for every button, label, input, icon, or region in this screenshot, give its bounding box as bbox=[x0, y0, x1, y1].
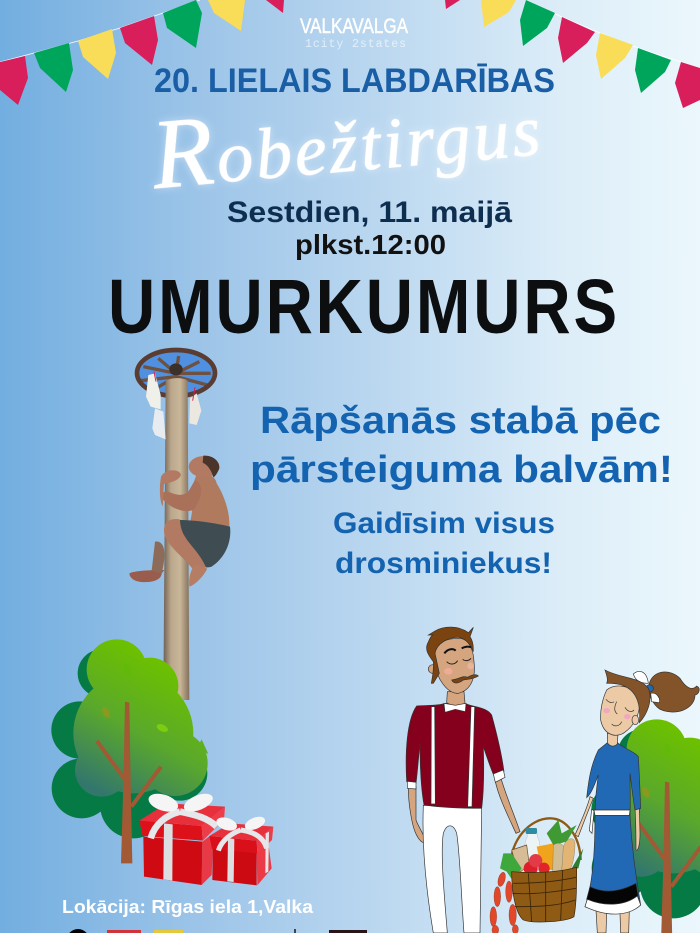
logo: dark square bbox=[329, 930, 367, 933]
climber bbox=[129, 456, 230, 587]
illustration: man bbox=[406, 627, 520, 933]
slogan bbox=[250, 400, 673, 491]
time: plkst.12:00 bbox=[295, 229, 446, 260]
large gift bbox=[139, 790, 225, 885]
moustache bbox=[452, 675, 478, 683]
dress bbox=[585, 743, 641, 913]
arms bbox=[575, 797, 640, 850]
tree: right bbox=[591, 719, 700, 933]
trousers bbox=[423, 805, 482, 933]
wheel on top of pole bbox=[137, 350, 215, 396]
shirt bbox=[406, 703, 504, 808]
food bbox=[512, 845, 529, 873]
illustration: woman bbox=[575, 670, 699, 933]
logo: black circle bbox=[66, 929, 90, 933]
small gift bbox=[209, 814, 273, 885]
invitation bbox=[333, 507, 555, 580]
bottle bbox=[525, 828, 540, 865]
heading: event name: 20. LIELAIS LABDARĪBAS bbox=[154, 62, 555, 100]
invitation: drosminiekus! bbox=[335, 547, 552, 580]
tree: left bbox=[51, 639, 208, 863]
ponytail and bow bbox=[649, 672, 699, 712]
logo: small tip bbox=[294, 929, 296, 933]
bunting: right garland bbox=[445, 0, 700, 108]
hair bbox=[605, 670, 650, 723]
pole bbox=[163, 378, 189, 700]
basket body bbox=[512, 867, 577, 922]
bunting: left garland bbox=[0, 0, 284, 105]
location text: Lokācija: Rīgas iela 1,Valka bbox=[62, 897, 314, 917]
sausages bbox=[490, 871, 518, 933]
logo: Valka Valga: 1city 2states bbox=[305, 38, 406, 51]
hair bbox=[427, 627, 473, 683]
pole with climber photo bbox=[129, 350, 230, 700]
legs bbox=[596, 910, 629, 933]
logo: yellow crest bbox=[154, 930, 183, 933]
bow tie bbox=[444, 703, 466, 712]
slogan: Rāpšanās stabā pēc bbox=[260, 400, 661, 442]
invitation: Gaidīsim visus bbox=[333, 507, 555, 540]
slogan: pārsteiguma balvām! bbox=[250, 449, 673, 491]
hand and arms bbox=[495, 775, 520, 833]
main title: UMURKUMURS bbox=[108, 264, 617, 350]
suspenders bbox=[431, 707, 475, 807]
illustration: market basket bbox=[490, 818, 583, 933]
logo: Valka Valga bbox=[300, 15, 408, 51]
script title: Robežtirgus bbox=[146, 65, 547, 210]
logo: Valka Valga: VALKAVALGA bbox=[300, 15, 408, 38]
prize bags bbox=[146, 372, 201, 439]
date: Sestdien, 11. maijā bbox=[227, 196, 512, 229]
handle bbox=[511, 818, 581, 867]
logo: red crest bbox=[107, 930, 141, 933]
eyes and brows bbox=[447, 658, 471, 664]
neck and head bbox=[607, 733, 618, 746]
gift boxes bbox=[139, 790, 273, 885]
neck and head bbox=[447, 692, 465, 705]
waist band bbox=[589, 809, 630, 833]
partner logos, cropped at the page bottom bbox=[66, 929, 367, 933]
